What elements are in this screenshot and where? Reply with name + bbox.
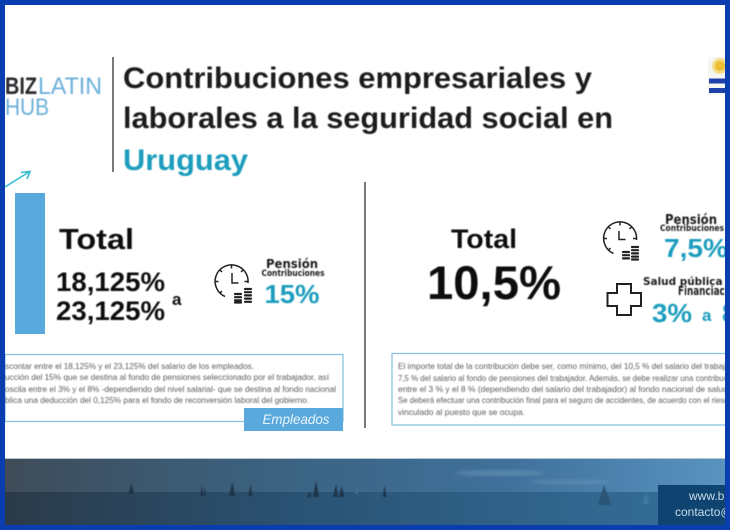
employer total heading: Total bbox=[451, 224, 517, 254]
employee description box: blica una deducción del 0,125% para el fondo de reconversión laboral del gobierno. bbox=[5, 395, 309, 405]
employee description box: oscila entre el 3% y el 8% -dependiendo del nivel salarial- que se destina al fondo nacional bbox=[5, 384, 336, 394]
logo: Biz Latin Hub: HUB bbox=[5, 94, 49, 121]
employee pension text: Contribuciones bbox=[262, 269, 324, 279]
employer description box: entre el 3 % y el 8 % (dependiendo del salario del trabajador) al fondo nacional de salud. bbox=[398, 384, 730, 394]
employee total range: 23,125% bbox=[56, 296, 165, 326]
employees tag bbox=[244, 408, 343, 431]
employee description box: ucción del 15% que se destina al fondo de pensiones seleccionado por el trabajador, así bbox=[5, 372, 330, 382]
footer contact box bbox=[658, 485, 730, 525]
title: Contribuciones empresariales y bbox=[123, 62, 592, 95]
panel divider bbox=[364, 182, 366, 428]
employees tag: Empleados bbox=[262, 411, 330, 427]
icon: flag of Uruguay bbox=[708, 57, 725, 95]
employer pension text: 7,5% bbox=[664, 233, 728, 263]
employer pension text: Contribuciones bbox=[660, 224, 724, 234]
employer health text bbox=[643, 276, 725, 324]
employee total range bbox=[56, 267, 182, 326]
icon: health cross bbox=[608, 284, 641, 315]
footer: seascape photo with sailboats bbox=[5, 458, 725, 525]
employee total range: a bbox=[172, 290, 182, 309]
logo: Biz Latin Hub: BIZ bbox=[5, 73, 37, 100]
panel: employers bbox=[392, 213, 730, 425]
employee total heading: Total bbox=[59, 224, 134, 256]
employee description box: scontar entre el 18,125% y el 23,125% del salario de los empleados. bbox=[5, 361, 254, 371]
employee description box bbox=[5, 354, 343, 431]
title: laborales a la seguridad social en bbox=[123, 102, 613, 135]
employer pension text: Pensión bbox=[665, 213, 717, 228]
employee pension text: Pensión bbox=[266, 256, 318, 271]
employer pension text bbox=[660, 213, 728, 263]
logo: Biz Latin Hub: LATIN bbox=[38, 73, 102, 100]
employer health text: a bbox=[702, 306, 712, 325]
panel: employees bbox=[5, 224, 343, 431]
title divider bbox=[112, 57, 114, 172]
icon: clock and coins bbox=[604, 222, 638, 260]
employer total value: 10,5% bbox=[427, 256, 561, 309]
bar: employee total bbox=[15, 193, 45, 334]
employer description box: vinculado al puesto que se ocupa. bbox=[398, 407, 525, 417]
logo: Biz Latin Hub bbox=[6, 76, 101, 116]
employee pension text bbox=[262, 256, 324, 309]
employee pension text: 15% bbox=[264, 279, 320, 309]
employer description box bbox=[392, 354, 730, 425]
title: Uruguay bbox=[123, 144, 248, 177]
icon: growth arrow bbox=[5, 172, 30, 187]
title bbox=[123, 62, 613, 177]
employer health text: 3% bbox=[652, 298, 692, 328]
employee total range: 18,125% bbox=[56, 267, 165, 297]
icon: clock and coins bbox=[215, 265, 251, 302]
